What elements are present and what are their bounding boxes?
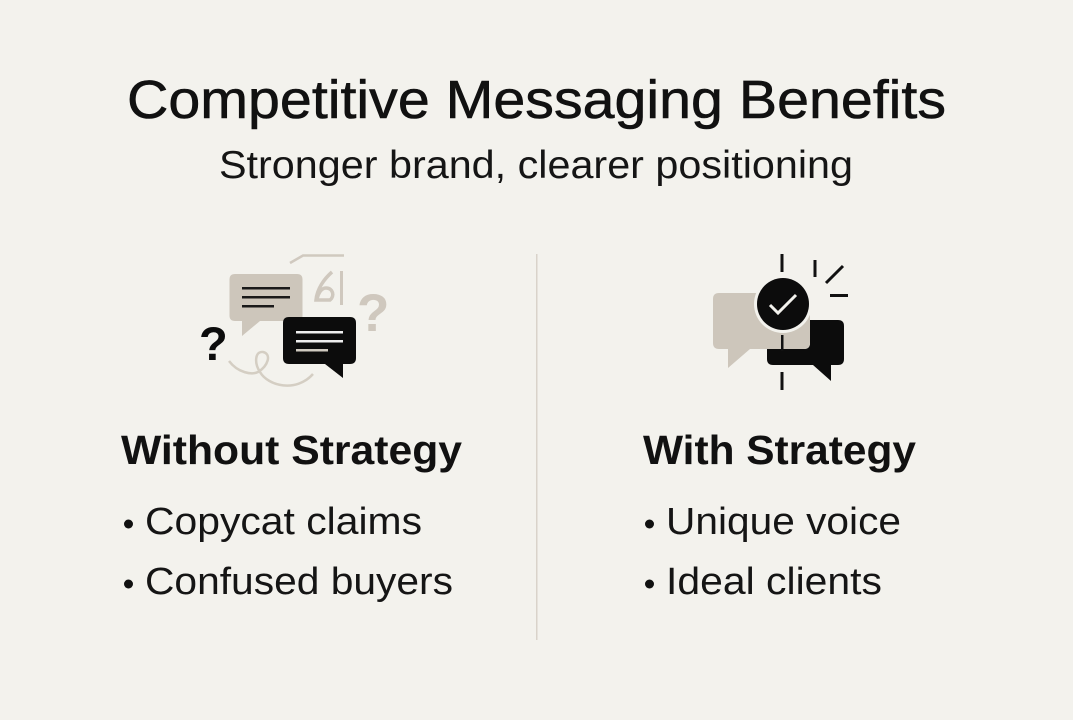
- icon: grey question mark: ?: [357, 284, 389, 343]
- list: with strategy: Unique voice: [666, 501, 901, 543]
- icon: black question mark: ?: [199, 317, 228, 370]
- panel: with strategy: [643, 254, 916, 603]
- heading: without strategy: Without Strategy: [121, 427, 462, 473]
- icon: confused speech bubbles: [199, 256, 389, 386]
- list: with strategy: [645, 501, 901, 603]
- panel: without strategy: [121, 256, 462, 603]
- title: Competitive Messaging Benefits: [127, 70, 946, 130]
- icon: clear speech bubbles with check: [713, 254, 848, 390]
- list: without strategy: Copycat claims: [145, 501, 422, 543]
- list: with strategy: Ideal clients: [666, 561, 882, 603]
- list: without strategy: [124, 501, 453, 603]
- subtitle: Stronger brand, clearer positioning: [219, 144, 853, 187]
- divider: [536, 254, 538, 640]
- list: without strategy: Confused buyers: [145, 561, 453, 603]
- heading: with strategy: With Strategy: [643, 427, 916, 473]
